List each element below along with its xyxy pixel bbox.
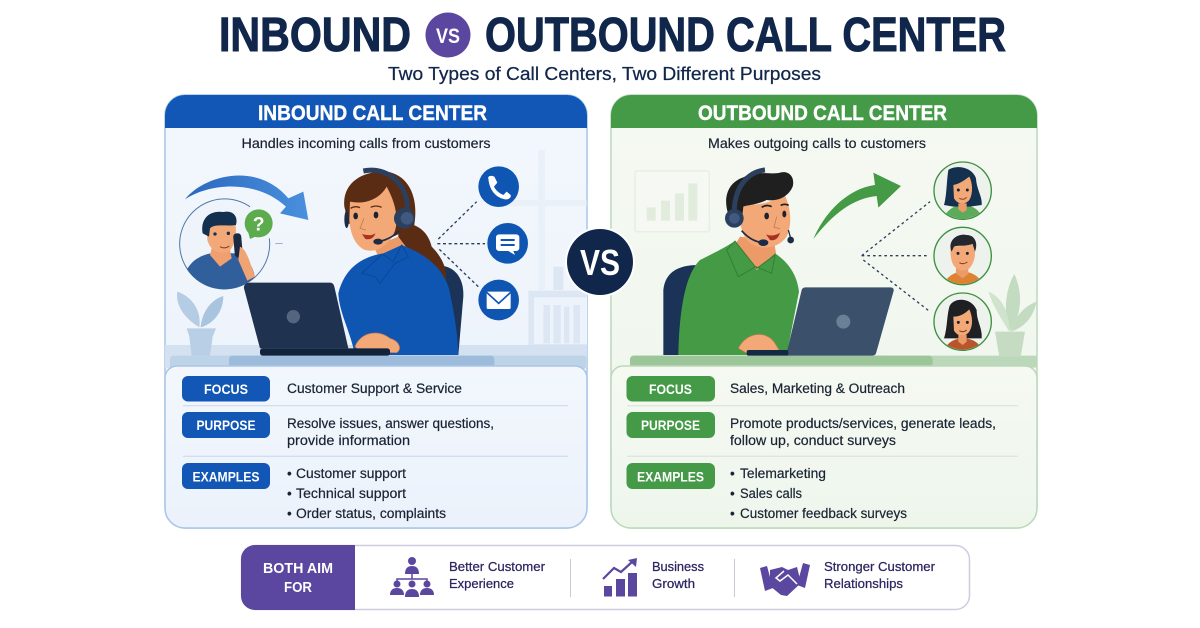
outbound description: Makes outgoing calls to customers xyxy=(708,135,926,151)
examples row: Customer feedback surveys xyxy=(740,506,907,521)
arrow: outgoing call xyxy=(813,173,901,239)
illustration: inbound agent scene xyxy=(165,150,588,369)
examples row: Customer support xyxy=(296,466,406,481)
vs badge: VS xyxy=(580,242,620,283)
customer avatar with question bubble: ? xyxy=(253,214,265,235)
examples row: Telemarketing xyxy=(740,466,826,481)
examples row: • xyxy=(287,486,292,501)
focus row xyxy=(182,376,462,402)
dotted connectors xyxy=(862,202,930,312)
examples row: • xyxy=(730,506,735,521)
examples row: Sales calls xyxy=(740,486,802,501)
panel: outbound call center xyxy=(611,95,1038,528)
panel header: outbound xyxy=(611,95,1037,128)
dotted connectors xyxy=(437,202,485,287)
subtitle: Two Types of Call Centers, Two Different Purposes xyxy=(388,63,821,84)
customer avatar with question bubble xyxy=(179,199,283,290)
icon: mail xyxy=(478,280,519,320)
arrow: incoming call xyxy=(185,176,308,220)
inbound description: Handles incoming calls from customers xyxy=(242,135,490,151)
avatar: customer 2 xyxy=(934,227,991,287)
purpose row xyxy=(626,412,996,448)
purpose row: Promote products/services, generate leads, xyxy=(730,416,996,431)
examples row: EXAMPLES xyxy=(637,468,704,484)
better customer experience: Experience xyxy=(449,576,514,591)
icon: chat xyxy=(487,223,528,264)
icon: growth chart xyxy=(603,558,637,596)
examples row: • xyxy=(730,466,735,481)
stronger customer relationships xyxy=(824,559,936,591)
icon: handshake xyxy=(760,563,810,596)
title: OUTBOUND CALL CENTER xyxy=(485,8,1006,62)
examples row: Technical support xyxy=(296,486,406,501)
avatar: customer 3 xyxy=(934,293,991,353)
purpose row: provide information xyxy=(287,433,410,448)
title xyxy=(219,8,1006,62)
laptop xyxy=(244,283,390,356)
stronger customer relationships: Stronger Customer xyxy=(824,559,936,574)
examples row: EXAMPLES xyxy=(192,468,260,484)
stronger customer relationships: Relationships xyxy=(824,576,904,591)
icon: plant xyxy=(177,292,223,356)
chair xyxy=(663,265,698,355)
focus row: FOCUS xyxy=(649,381,692,397)
examples row: • xyxy=(287,506,292,521)
both aim for label xyxy=(241,545,355,610)
purpose row xyxy=(182,412,494,448)
icon: plant xyxy=(988,274,1037,357)
title: INBOUND xyxy=(219,8,411,62)
bottom bar: both aim for xyxy=(241,545,970,610)
avatar: customer 1 xyxy=(934,162,991,220)
panel header: inbound: INBOUND CALL CENTER xyxy=(258,101,487,125)
icon: phone xyxy=(478,166,519,207)
panel header: inbound xyxy=(165,95,587,128)
business growth xyxy=(652,559,704,591)
vs badge xyxy=(565,227,635,297)
better customer experience: Better Customer xyxy=(449,559,546,574)
focus row: Sales, Marketing & Outreach xyxy=(730,381,905,396)
title: VS xyxy=(436,25,460,48)
chair xyxy=(443,266,463,355)
agent: man with headset xyxy=(678,170,799,355)
both aim for label: BOTH AIM xyxy=(263,561,333,577)
outbound details xyxy=(611,366,1037,528)
better customer experience xyxy=(449,559,546,591)
purpose row: follow up, conduct surveys xyxy=(730,433,896,448)
agent: woman with headset xyxy=(338,170,458,355)
purpose row: PURPOSE xyxy=(641,417,700,433)
business growth: Business xyxy=(652,559,704,574)
inbound details xyxy=(165,366,587,528)
illustration: outbound agent scene xyxy=(630,162,1038,368)
examples row xyxy=(182,463,446,521)
examples row xyxy=(626,463,907,521)
purpose row: Resolve issues, answer questions, xyxy=(287,416,494,431)
laptop xyxy=(747,287,894,356)
focus row: Customer Support & Service xyxy=(287,381,462,396)
examples row: • xyxy=(287,466,292,481)
focus row: FOCUS xyxy=(204,381,248,397)
purpose row: PURPOSE xyxy=(196,417,256,433)
business growth: Growth xyxy=(652,576,695,591)
focus row xyxy=(626,376,905,402)
panel: inbound call center xyxy=(165,95,588,528)
examples row: • xyxy=(730,486,735,501)
examples row: Order status, complaints xyxy=(296,506,446,521)
faint chart xyxy=(635,171,709,232)
panel header: outbound: OUTBOUND CALL CENTER xyxy=(698,101,947,125)
icon: org chart xyxy=(390,557,434,597)
both aim for label: FOR xyxy=(284,580,312,596)
